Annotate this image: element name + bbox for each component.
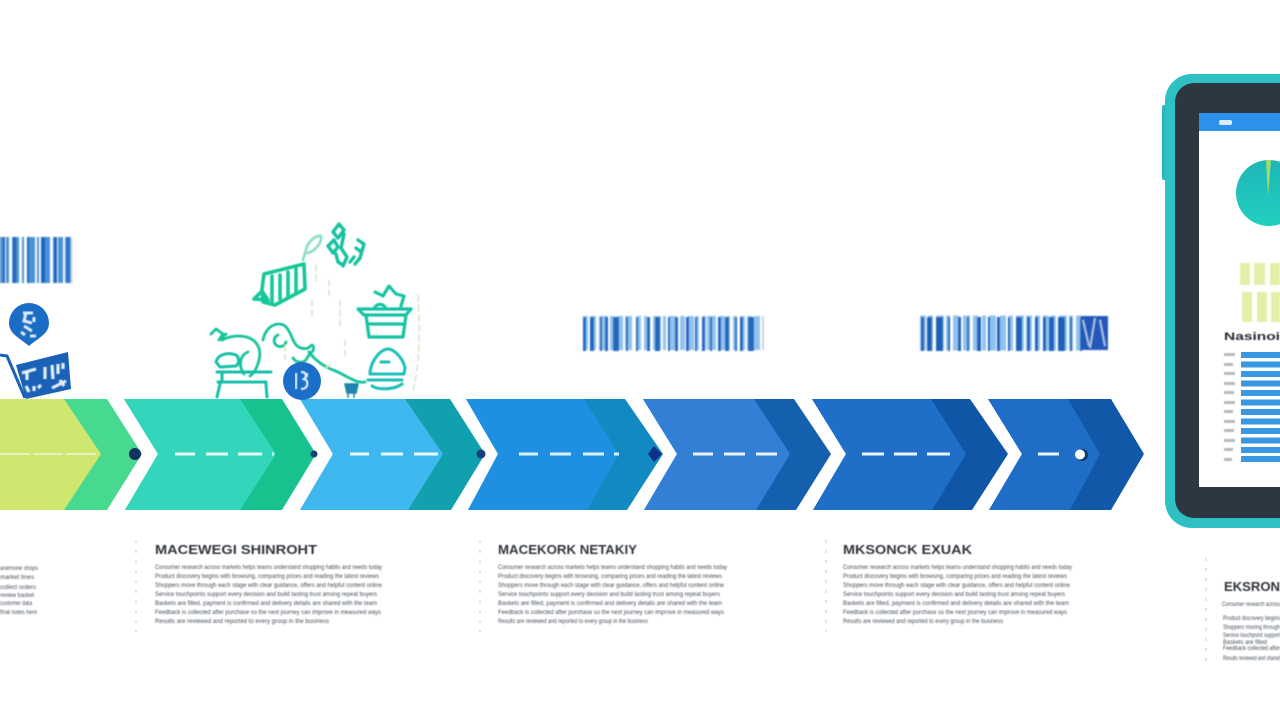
chevron step 6 — [812, 399, 1008, 510]
block 4 body copy — [1222, 601, 1280, 662]
doodle: price tag book — [254, 264, 305, 305]
text block 3 — [826, 540, 1073, 632]
block 3 body copy: Shoppers move through each stage with clear guidance, offers and helpful content online — [843, 582, 1070, 589]
block 1 heading: MACEWEGI SHINROHT — [155, 542, 317, 557]
icon: coin badge — [283, 362, 321, 400]
block 4 heading: EKSRON — [1224, 579, 1280, 594]
block 4 body copy: Baskets are filled — [1223, 639, 1267, 646]
text block 0: cropped left column — [0, 565, 39, 616]
green data blocks — [1240, 263, 1280, 322]
doodle: cluster of figures — [328, 224, 364, 266]
doodle: covered dish — [368, 349, 405, 389]
chevron step 4 — [466, 399, 663, 510]
chevron step 1 — [0, 399, 142, 510]
block 3 body copy: Baskets are filled, payment is confirmed and delivery details are shared with the team — [843, 600, 1069, 607]
block 2 body copy: Consumer research across markets helps teams understand shopping habits and needs today — [498, 564, 728, 571]
block 3 body copy — [843, 564, 1073, 625]
block 1 body copy: Results are reviewed and reported to every group in the business — [155, 618, 330, 625]
block 3 body copy: Service touchpoints support every decision and build lasting trust among repeat buyers — [843, 591, 1066, 598]
block 2 body copy: Baskets are filled, payment is confirmed and delivery details are shared with the team — [498, 600, 722, 607]
block 1 body copy — [155, 564, 383, 625]
barcode graphic: right — [920, 316, 1108, 350]
text block 0: cropped left column: final notes here — [0, 609, 37, 616]
block 2 body copy: Feedback is collected after purchase so the next journey can improve in measured ways — [498, 609, 725, 616]
tablet chart heading: Nasinoi — [1224, 331, 1280, 343]
chevron step 2 — [124, 399, 318, 510]
block 2 body copy: Product discovery begins with browsing, comparing prices and reading the latest reviews — [498, 573, 723, 580]
text block 2 — [480, 540, 728, 632]
block 1 body copy: Product discovery begins with browsing, comparing prices and reading the latest reviews — [155, 573, 380, 580]
block 2 body copy: Service touchpoints support every decision and build lasting trust among repeat buyers — [498, 591, 721, 598]
tablet teal frame — [1162, 105, 1168, 180]
block 1 body copy: Baskets are filled, payment is confirmed and delivery details are shared with the team — [155, 600, 377, 607]
icon: location pin badge — [9, 303, 49, 346]
text block 1 — [136, 540, 383, 632]
block 2 heading: MACEKORK NETAKIY — [498, 542, 637, 557]
text block 4: cropped right column — [1206, 558, 1280, 664]
barcode graphic: centre — [583, 316, 763, 350]
block 1 body copy: Shoppers move through each stage with clear guidance, offers and helpful content online — [155, 582, 382, 589]
block 3 heading: MKSONCK EXUAK — [843, 542, 973, 557]
text block 0: cropped left column: anemone shops — [0, 565, 39, 572]
doodle: tray with food — [216, 354, 271, 397]
text block 0: cropped left column: customer data — [0, 600, 32, 607]
icon: shopping cart — [0, 352, 71, 399]
icon: small cart marker — [345, 384, 358, 398]
block 3 body copy: Feedback is collected after purchase so the next journey can improve in measured ways — [843, 609, 1068, 616]
horizontal bars list — [1224, 352, 1280, 462]
doodle: loop vine — [211, 324, 365, 382]
block 3 body copy: Results are reviewed and reported to every group in the business — [843, 618, 1004, 625]
tablet screen — [1199, 113, 1280, 487]
block 2 body copy: Results are reviewed and reported to every group in the business — [498, 618, 649, 625]
block 1 body copy: Service touchpoints support every decision and build lasting trust among repeat buyers — [155, 591, 378, 598]
screen header bar — [1199, 113, 1280, 131]
block 3 body copy: Product discovery begins with browsing, comparing prices and reading the latest reviews — [843, 573, 1068, 580]
block 1 body copy: Feedback is collected after purchase so the next journey can improve in measured ways — [155, 609, 382, 616]
tablet dark bezel — [1175, 83, 1280, 518]
tablet device — [1162, 74, 1280, 528]
block 2 body copy — [498, 564, 728, 625]
chevron step 5 — [643, 399, 831, 510]
doodle: leaf — [303, 236, 321, 260]
block 3 body copy: Consumer research across markets helps teams understand shopping habits and needs today — [843, 564, 1073, 571]
text block 0: cropped left column: collect orders — [0, 584, 37, 591]
chevron timeline — [0, 399, 1144, 510]
text block 0: cropped left column: market lines — [0, 574, 35, 581]
pie chart — [1236, 160, 1280, 226]
barcode graphic: left — [0, 238, 72, 284]
illustration: green shopping doodles — [211, 224, 419, 397]
block 1 body copy: Consumer research across markets helps teams understand shopping habits and needs today — [155, 564, 383, 571]
chevron step 3 — [300, 399, 486, 510]
block 2 body copy: Shoppers move through each stage with clear guidance, offers and helpful content online — [498, 582, 724, 589]
chevron step 7 — [988, 399, 1144, 510]
doodle: faint vertical strokes — [285, 265, 419, 394]
text block 0: cropped left column: review basket — [0, 592, 34, 599]
doodle: basket with fruit — [358, 286, 411, 337]
